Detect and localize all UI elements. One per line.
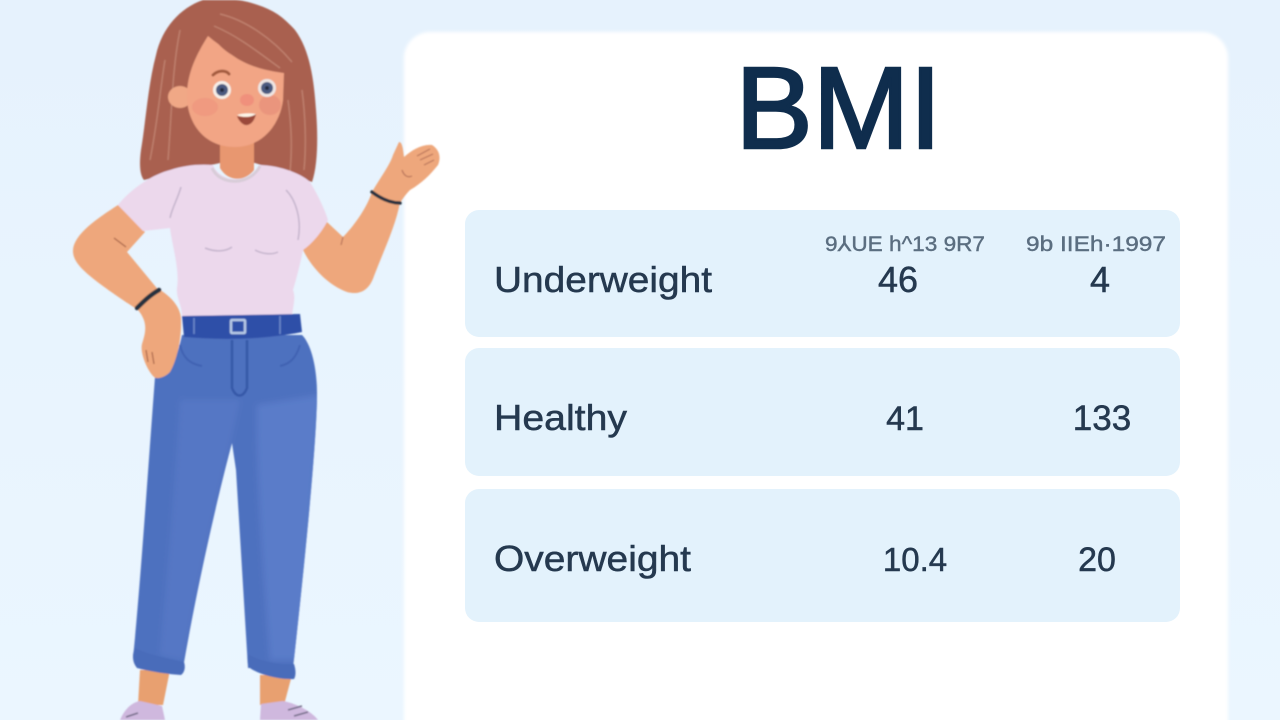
title: BMI xyxy=(735,43,942,173)
neck xyxy=(220,135,254,179)
row: Overweight: 20 xyxy=(1078,541,1116,579)
row: Healthy xyxy=(465,348,1180,476)
feet and socks xyxy=(120,670,318,720)
illustration: woman pointing at table xyxy=(73,0,440,720)
row: Overweight: 10.4 xyxy=(883,541,947,578)
row: Underweight: 9b IIEh·1997 xyxy=(1026,233,1166,256)
fringe highlights xyxy=(214,14,292,68)
row: Underweight: 4 xyxy=(1090,259,1110,300)
row: Healthy: Healthy xyxy=(494,397,628,438)
belt xyxy=(182,314,302,339)
row: Underweight xyxy=(465,210,1180,337)
fringe xyxy=(203,0,303,75)
row: Overweight: Overweight xyxy=(494,538,691,579)
shirt xyxy=(118,165,328,316)
right arm and hand xyxy=(303,142,440,293)
row: Overweight xyxy=(465,489,1180,622)
cuffs xyxy=(133,648,296,679)
row: Underweight: 9⅄UE h^13 9R7 xyxy=(825,233,985,256)
row: Underweight: 46 xyxy=(878,259,918,300)
jeans xyxy=(133,335,320,668)
hair xyxy=(140,0,317,182)
row: Healthy: 41 xyxy=(886,400,924,438)
left arm and hand xyxy=(73,205,181,378)
face xyxy=(187,36,284,147)
row: Healthy: 133 xyxy=(1073,399,1131,438)
ear xyxy=(168,86,192,108)
row: Underweight: Underweight xyxy=(494,259,712,300)
panel: BMI table card xyxy=(404,32,1228,720)
